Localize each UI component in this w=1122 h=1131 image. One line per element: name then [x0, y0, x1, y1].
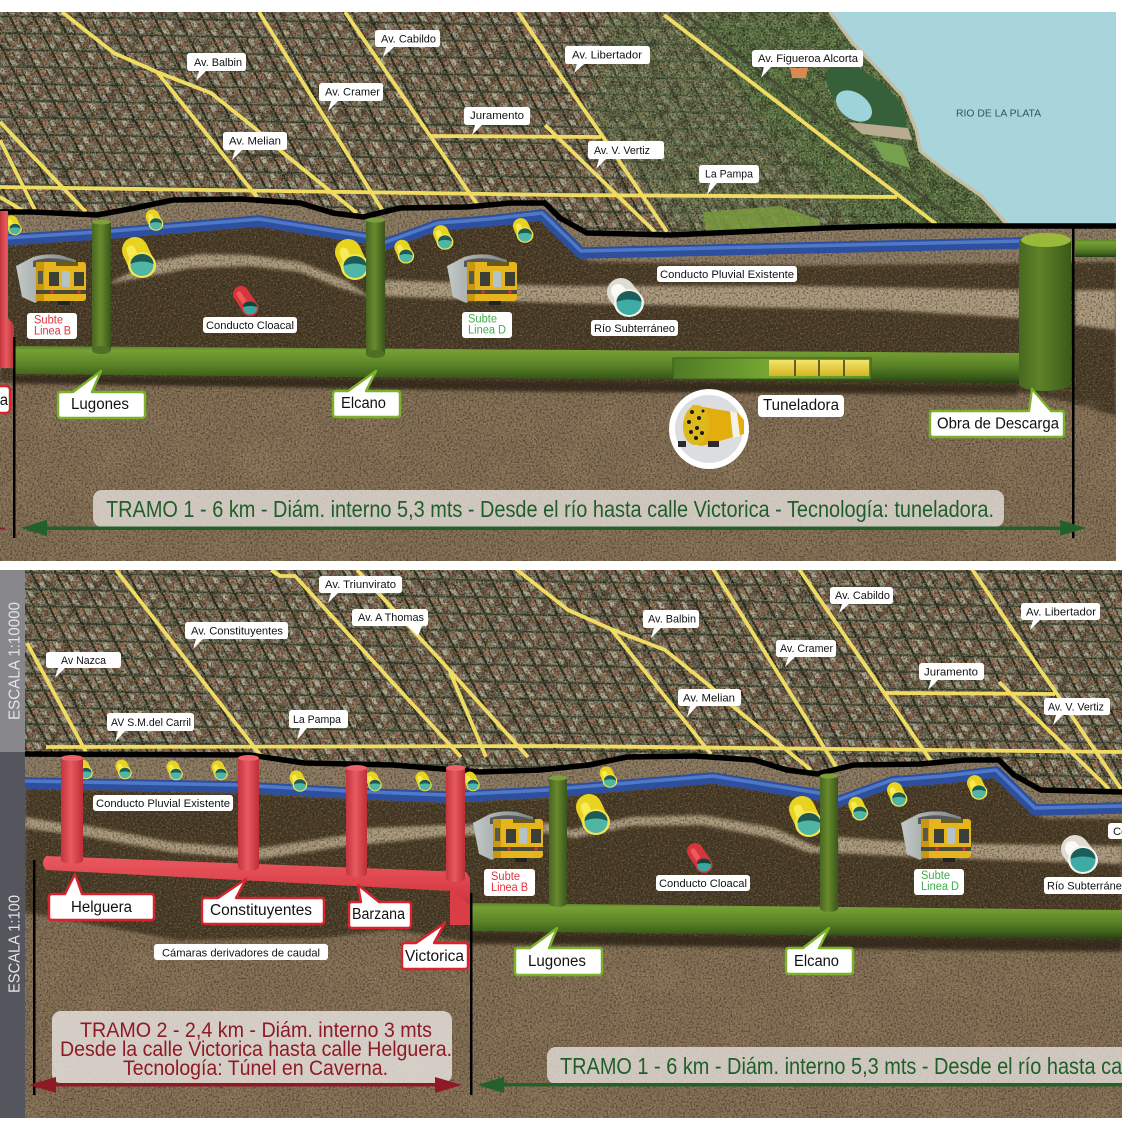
callout: Helguera: Helguera	[71, 899, 132, 916]
underground soil section	[25, 745, 1122, 1118]
heading: tramo 2 banner: Desde la calle Victorica hasta calle Helguera.	[60, 1037, 452, 1061]
aerial city map	[25, 570, 1122, 795]
aerial city map	[0, 12, 1004, 232]
label: Conducto Pluvial fragment right	[1108, 823, 1122, 839]
label: Av. V. Vertiz: Av. V. Vertiz	[1048, 702, 1104, 714]
callout: Tuneladora	[758, 395, 844, 417]
label: Conducto Pluvial Existente: Conducto Pluvial Existente	[660, 269, 794, 281]
label: Subte Linea B	[484, 869, 535, 896]
label: Subte Linea D	[462, 312, 512, 338]
callout: Constituyentes	[202, 879, 324, 924]
label: Subte Linea D: Linea D	[921, 881, 959, 893]
label: Av. Figueroa Alcorta: Av. Figueroa Alcorta	[758, 53, 859, 65]
label: Av. Triunvirato	[319, 576, 402, 603]
icon: subway train line D	[447, 254, 517, 305]
callout: Barzana: Barzana	[352, 906, 405, 923]
label: Av. Libertador: Av. Libertador	[572, 50, 642, 62]
arrow: tramo 1 extent	[477, 1077, 1122, 1093]
tunnel shadow	[14, 376, 1018, 396]
arrow: tramo 2 tip fragment	[0, 528, 5, 530]
callout: Constituyentes: Constituyentes	[210, 902, 312, 919]
label: Subte Linea B: Linea B	[34, 326, 71, 338]
label: La Pampa: La Pampa	[293, 714, 342, 726]
label: Av. Balbin: Av. Balbin	[648, 614, 696, 626]
label: Av. Libertador: Av. Libertador	[1026, 606, 1096, 618]
label: Av. Balbin	[643, 610, 699, 638]
section dimension lines	[33, 860, 472, 1095]
label: La Pampa: La Pampa	[705, 168, 754, 180]
callout: Elcano	[333, 371, 400, 417]
label: Av. Cabildo: Av. Cabildo	[381, 34, 436, 46]
tunnel boring cutaway	[673, 358, 871, 379]
label: Subte Linea B: Subte	[491, 871, 520, 883]
arrow: tramo 1 extent	[21, 520, 1086, 536]
heading: tramo 1 banner: TRAMO 1 - 6 km - Diám. interno 5,3 mts - Desde el río hasta calle Victorica - Tecnología: tuneladora.	[106, 496, 994, 522]
label: La Pampa	[289, 710, 348, 740]
label: Av. Cramer	[776, 640, 836, 667]
heading: tramo 2 banner	[52, 1011, 452, 1083]
label: Av. A Thomas: Av. A Thomas	[358, 612, 424, 624]
label: Av. Cramer	[319, 83, 383, 111]
label: La Pampa	[699, 165, 759, 195]
icon: subway train line B	[16, 254, 86, 305]
callout: Elcano: Elcano	[794, 953, 839, 970]
callout: Tuneladora: Tuneladora	[763, 397, 839, 414]
label: Juramento	[464, 107, 530, 135]
label: Av. Melian	[678, 689, 741, 717]
callout: Obra de Descarga: Obra de Descarga	[937, 416, 1059, 432]
callout: Helguera	[49, 874, 154, 920]
callout: Elcano	[786, 928, 853, 974]
label: AV S.M.del Carril	[107, 713, 194, 742]
section content	[25, 569, 1122, 1118]
label: Av. V. Vertiz: Av. V. Vertiz	[594, 145, 650, 157]
callout: Victorica fragment	[0, 386, 10, 413]
label: Juramento	[919, 663, 984, 690]
label: Av. Figueroa Alcorta	[752, 50, 863, 78]
yellow avenue lines	[0, 12, 936, 232]
icon: sewer pipe red	[239, 294, 258, 316]
label: Av. Libertador	[565, 46, 650, 73]
label: Subte Linea B: Linea B	[491, 882, 528, 894]
green tunnel tramo 1	[470, 774, 1122, 939]
label: Río Subterráneo: Río Subterráneo	[594, 323, 675, 335]
river: Rio de la Plata: RIO DE LA PLATA	[956, 108, 1041, 120]
label: Av Nazca: Av Nazca	[61, 655, 107, 667]
label: Río Subterráneo	[1044, 877, 1122, 894]
scale strip 1:100: ESCALA 1:100	[6, 895, 24, 993]
discharge shaft cylinder	[1019, 233, 1071, 391]
label: Av. Melian	[223, 132, 287, 160]
label: Juramento: Juramento	[470, 110, 524, 122]
label: Av. Cramer: Av. Cramer	[325, 86, 380, 98]
red tunnel tramo 2	[43, 755, 470, 925]
label: Cámaras derivadores de caudal	[154, 944, 328, 960]
section dimension lines	[13, 228, 1074, 538]
callout: Victorica: Victorica	[405, 948, 464, 965]
label: Av. Cabildo	[375, 30, 440, 57]
icon: sewer pipe red	[693, 851, 712, 873]
label: Av. Balbin	[187, 53, 246, 81]
heading: tramo 1 banner	[547, 1047, 1122, 1084]
service pipes yellow	[8, 216, 533, 280]
label: Juramento: Juramento	[924, 666, 978, 678]
icon: underground river pipe white	[1068, 846, 1098, 874]
scale strip 1:10000: ESCALA 1:10000	[6, 602, 24, 720]
yellow avenue lines	[27, 569, 1122, 789]
label: Conducto Cloacal: Conducto Cloacal	[206, 320, 294, 332]
heading: tramo 2 banner: Tecnología: Túnel en Caverna.	[123, 1056, 388, 1080]
icon: tunnel boring machine	[669, 389, 749, 469]
underground soil section	[0, 190, 1116, 561]
icon: underground river pipe white	[614, 289, 644, 317]
icon: subway train line D	[901, 811, 971, 862]
label: Av. Cramer: Av. Cramer	[780, 643, 833, 655]
callout: Elcano: Elcano	[341, 395, 386, 412]
panel: lower section tramo 2 and tramo 1	[0, 569, 1122, 1118]
green tunnel stub beyond the line	[1075, 240, 1116, 257]
label: Av. Balbin: Av. Balbin	[194, 57, 242, 69]
callout: Victorica	[402, 923, 468, 969]
label: Av. A Thomas	[352, 609, 428, 636]
label: Subte Linea D: Linea D	[468, 324, 506, 336]
callout: Lugones: Lugones	[71, 396, 129, 413]
label: Av. Constituyentes: Av. Constituyentes	[191, 626, 284, 638]
label: Cámaras derivadores de caudal: Cámaras derivadores de caudal	[162, 948, 320, 960]
label: Subte Linea D	[914, 869, 964, 895]
label: Av Nazca	[46, 652, 121, 678]
service pipes yellow	[79, 766, 987, 837]
river: Rio de la Plata	[832, 12, 1116, 226]
red tunnel fragment at left	[0, 211, 14, 368]
label: Av. Cabildo: Av. Cabildo	[835, 590, 890, 602]
ground line	[25, 754, 1122, 792]
callout: Lugones: Lugones	[528, 953, 586, 970]
ground line	[0, 199, 1116, 235]
label: Subte Linea B: Subte	[34, 314, 63, 326]
label: AV S.M.del Carril: AV S.M.del Carril	[111, 717, 191, 729]
existing storm drain: blue pipe	[5, 213, 1022, 253]
arrow: tramo 2 extent	[29, 1077, 462, 1093]
scale strip 1:10000	[0, 570, 25, 752]
label: Av. Melian: Av. Melian	[229, 136, 281, 148]
label: Conducto Pluvial Existente left: Conducto Pluvial Existente	[96, 798, 230, 810]
label: Subte Linea D: Subte	[468, 314, 497, 326]
label: Av. Melian: Av. Melian	[683, 692, 735, 704]
label: Av. Constituyentes	[185, 622, 288, 649]
callout: Obra de Descarga	[930, 389, 1064, 437]
green tunnel tramo 1	[14, 218, 1022, 383]
label: Av. V. Vertiz	[588, 141, 664, 169]
label: Río Subterráneo	[591, 320, 678, 336]
icon: subway train line B	[473, 811, 543, 862]
label: Av. V. Vertiz	[1044, 698, 1110, 725]
tunnel shadow	[472, 933, 1122, 952]
heading: tramo 2 banner: TRAMO 2 - 2,4 km - Diám. interno 3 mts	[80, 1018, 432, 1042]
panel: tramo 1 upper section	[0, 12, 1116, 561]
label: Conducto Cloacal: Conducto Cloacal	[659, 878, 747, 890]
label: Subte Linea D: Subte	[921, 870, 950, 882]
label: Subte Linea B	[27, 313, 77, 339]
scale strip 1:100	[0, 752, 25, 1118]
callout: Barzana	[349, 885, 411, 928]
heading: tramo 1 banner	[93, 490, 1004, 527]
callout: Lugones	[58, 371, 145, 418]
existing storm drain: blue pipe	[25, 770, 1122, 810]
label: Av. Cabildo	[830, 587, 893, 613]
label: Conducto Cloacal	[656, 875, 750, 891]
callout: Lugones	[515, 928, 602, 975]
label: Conducto Cloacal	[203, 317, 297, 333]
label: Av. Triunvirato: Av. Triunvirato	[325, 579, 396, 591]
label: Av. Libertador	[1021, 603, 1100, 630]
